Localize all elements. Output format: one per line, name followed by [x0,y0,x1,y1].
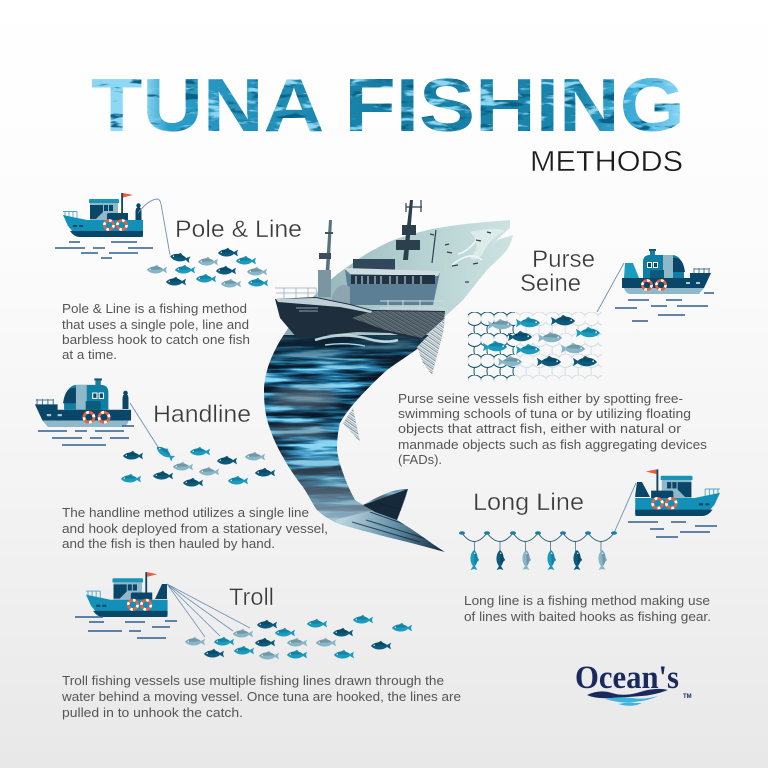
fish school [121,443,275,487]
panel: troll [61,572,461,720]
description: water behind a moving vessel. Once tuna are hooked, the lines are [61,690,461,704]
central illustration: tuna silhouette with trawler [255,200,520,560]
description: barbless hook to catch one fish [62,333,250,347]
description: manmade objects such as fish aggregating devices [398,438,707,452]
description: swimming schools of tuna or by utilizing floating [398,407,691,421]
heading: Pole & Line [175,216,302,243]
bow rail [275,288,318,298]
icon: handline boat [35,378,158,447]
mast rear [403,200,413,260]
description: Pole & Line is a fishing method [62,302,247,316]
longline with hanging fish [459,483,636,570]
fish school [185,615,412,660]
seabirds [430,232,491,282]
icon: pole and line boat [55,193,170,258]
superstructure [345,270,440,305]
heading: Seine [520,270,581,297]
logo: Ocean's: TM [683,694,692,700]
mast front [324,220,332,297]
heading: Troll [229,584,274,611]
deck machinery [332,285,350,305]
pectoral fin [343,408,360,442]
trawler [275,200,491,346]
panel: long line [459,469,720,624]
description [62,506,328,551]
fishing net [468,312,602,382]
description: and hook deployed from a stationary vessel, [62,522,328,536]
description [464,594,711,624]
title: TUNA FISHING [91,63,685,147]
description: objects that attract fish, either with natural or [398,422,681,436]
description: and the fish is then hauled by hand. [62,537,275,551]
fish school [483,315,600,366]
hull [275,297,445,340]
panel: pole and line [55,193,302,362]
icon: long line boat [628,469,720,537]
description: at a time. [62,348,117,362]
dorsal net fin [417,318,445,375]
description: (FADs). [398,453,442,467]
description: The handline method utilizes a single line [62,506,309,520]
icon: troll boat [75,572,250,638]
heading: Purse [532,246,595,273]
description: of lines with baited hooks as fishing gear. [464,610,711,624]
fish school [147,248,268,288]
tuna silhouette photo fill [264,220,513,552]
description: Long line is a fishing method making use [464,594,710,608]
icon: purse seine boat [597,249,714,321]
description [61,674,461,720]
panel: handline [35,378,328,551]
subtitle: METHODS [530,146,683,178]
heading [520,246,595,297]
heading: Long Line [473,489,584,516]
description [62,302,250,362]
logo: Ocean's: Ocean's [575,660,679,696]
panel: purse seine [398,246,714,467]
description [398,392,707,467]
description: Troll fishing vessels use multiple fishing lines drawn through the [62,674,444,688]
bow spray [315,335,398,342]
heading: Handline [153,401,251,428]
description: pulled in to unhook the catch. [62,706,243,720]
description: Purse seine vessels fish either by spotting free- [398,392,683,406]
description: that uses a single pole, line and [62,318,249,332]
